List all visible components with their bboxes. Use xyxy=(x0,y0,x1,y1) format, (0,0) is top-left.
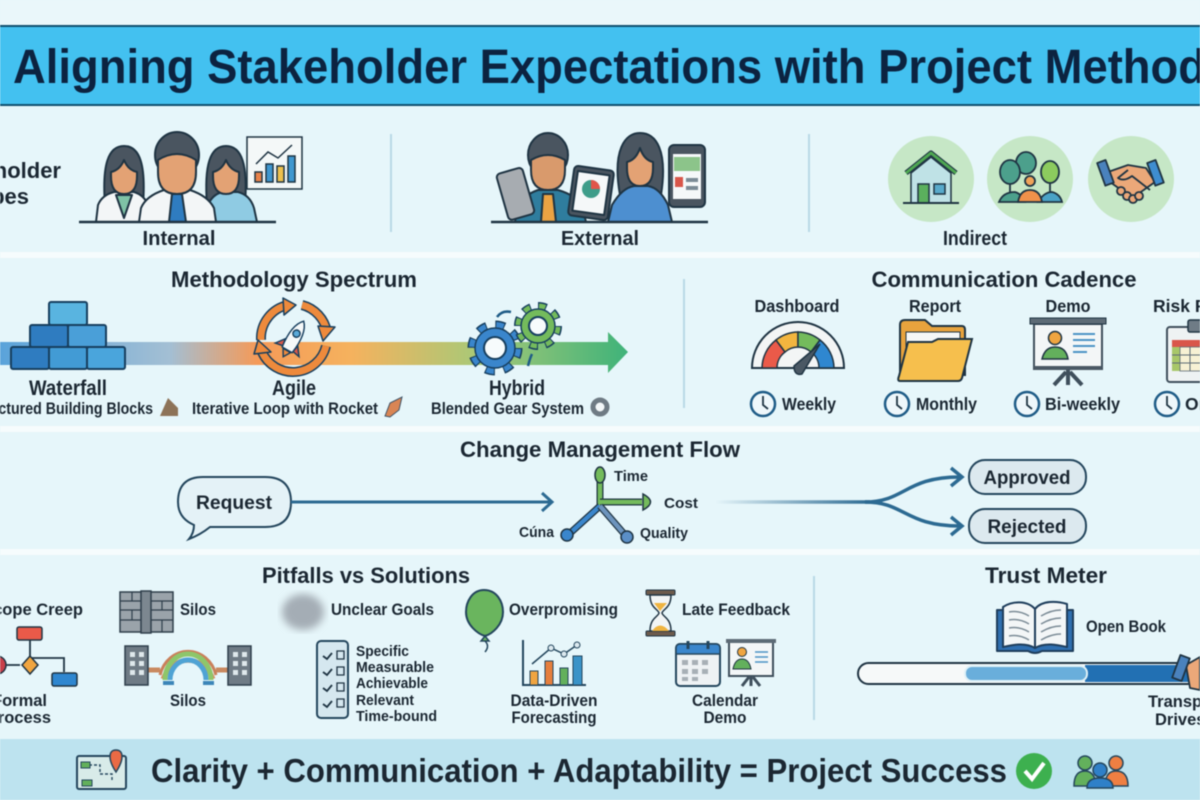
label: indirect stakeholders: Indirect xyxy=(943,228,1007,250)
panel: communication cadence xyxy=(751,267,1200,416)
pitfall: late feedback hourglass: Late Feedback xyxy=(682,601,791,619)
label: internal: Internal xyxy=(142,228,216,250)
panel: change management flow xyxy=(178,437,1086,543)
heading: pitfalls vs solutions: Pitfalls vs Solutions xyxy=(262,563,470,588)
column: demo xyxy=(1015,296,1120,416)
meter bar xyxy=(858,663,1198,684)
labels: constraint names: Time xyxy=(614,468,648,485)
label: waterfall: Waterfall xyxy=(29,377,107,400)
heading: communication cadence: Communication Cadence xyxy=(872,267,1136,292)
pitfall: silos wall: Silos xyxy=(180,601,216,619)
labels: constraint names: Quality xyxy=(640,525,689,542)
icon: team xyxy=(1074,756,1128,788)
panel: methodology spectrum xyxy=(0,267,628,418)
pill: approved xyxy=(969,460,1086,494)
solution: SMART checklist: Achievable xyxy=(356,675,428,692)
column: report: Report xyxy=(909,296,961,316)
callout: request bubble xyxy=(178,477,291,539)
solution: SMART checklist: Time-bound xyxy=(356,708,437,725)
pill: rejected: Rejected xyxy=(988,517,1066,538)
pill: approved: Approved xyxy=(984,468,1070,489)
labels: constraint names: Cúna xyxy=(519,524,555,541)
solution: calendar and demo: Demo xyxy=(704,709,746,727)
solution: rainbow bridge xyxy=(125,646,251,710)
pitfall: unclear goals: Unclear Goals xyxy=(331,601,434,619)
pitfall: silos wall xyxy=(120,591,216,633)
icon: community circle xyxy=(987,136,1073,222)
icon: house circle xyxy=(888,136,974,222)
column: dashboard: Dashboard xyxy=(754,296,840,316)
solution: data-driven forecasting: Forecasting xyxy=(512,709,596,727)
solution: data-driven forecasting: Data-Driven xyxy=(510,692,598,710)
solution: formal process xyxy=(0,627,77,727)
label: hybrid xyxy=(431,377,607,418)
icon: waterfall blocks xyxy=(11,302,125,369)
panel: stakeholder types xyxy=(0,132,1174,250)
divider xyxy=(391,134,814,720)
arrow: decision branches xyxy=(715,468,962,535)
footer band xyxy=(0,739,1200,800)
heading: change management flow: Change Management Flow xyxy=(460,437,741,462)
arrow: request to triangle xyxy=(291,493,552,511)
icon: chart card xyxy=(247,137,302,189)
callout: request bubble: Request xyxy=(196,493,273,514)
pill: rejected xyxy=(969,509,1086,543)
label: open book: Open Book xyxy=(1086,618,1167,636)
icon: handshake on meter xyxy=(1172,655,1200,690)
pitfall: late feedback hourglass xyxy=(646,590,791,636)
icon: handshake circle xyxy=(1088,136,1174,222)
label: hybrid: Hybrid xyxy=(489,377,545,400)
icon: external stakeholders xyxy=(491,133,708,222)
column: report xyxy=(885,296,977,416)
solution: SMART checklist: Measurable xyxy=(356,659,434,676)
solution: rainbow bridge: Silos xyxy=(170,692,206,710)
icon: check badge xyxy=(1016,753,1052,789)
icon: roadmap xyxy=(77,750,126,789)
solution: SMART checklist xyxy=(317,641,437,725)
label: transparency drives trust xyxy=(1148,693,1200,729)
slogan: Clarity + Communication + Adaptability = Project Success xyxy=(151,752,1007,789)
label: hybrid: Blended Gear System xyxy=(431,399,584,418)
column: dashboard: Weekly xyxy=(782,394,836,414)
icon: open book xyxy=(997,602,1073,653)
label: agile: Iterative Loop with Rocket xyxy=(192,399,378,418)
arrow: spectrum bar xyxy=(0,332,628,373)
heading: trust meter: Trust Meter xyxy=(985,563,1107,588)
solution: SMART checklist: Specific xyxy=(356,643,409,660)
pitfall: overpromising balloon: Overpromising xyxy=(509,601,618,619)
icon: triple constraint xyxy=(561,467,650,543)
label: external: External xyxy=(561,228,639,250)
heading: stakeholder types xyxy=(0,158,61,209)
column: demo: Demo xyxy=(1046,296,1090,316)
heading: methodology spectrum: Methodology Spectrum xyxy=(171,267,417,292)
column: report: Monthly xyxy=(916,394,977,414)
panel: trust meter xyxy=(858,563,1200,729)
column: risk report xyxy=(1153,296,1200,416)
icon: agile loop with rocket xyxy=(254,298,335,378)
pitfall: overpromising balloon xyxy=(466,590,618,652)
labels: constraint names: Cost xyxy=(664,495,698,512)
column: dashboard xyxy=(751,296,844,416)
solution: SMART checklist: Relevant xyxy=(356,692,414,709)
labels: constraint names xyxy=(519,468,698,542)
pitfall: unclear goals xyxy=(282,594,434,630)
solution: calendar and demo xyxy=(676,639,776,727)
solution: calendar and demo: Calendar xyxy=(692,692,759,710)
label: agile: Agile xyxy=(272,377,316,400)
title banner xyxy=(0,26,1200,105)
label: agile xyxy=(192,377,402,418)
column: demo: Bi-weekly xyxy=(1045,394,1120,414)
label: waterfall xyxy=(0,377,178,418)
solution: data-driven forecasting xyxy=(510,640,598,727)
panel: pitfalls vs solutions xyxy=(0,563,791,727)
icon: hybrid gears xyxy=(473,307,557,370)
icon: internal stakeholders xyxy=(79,132,276,222)
